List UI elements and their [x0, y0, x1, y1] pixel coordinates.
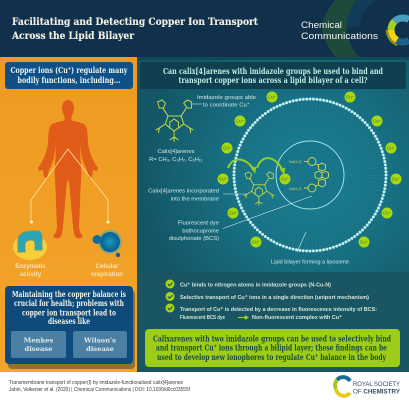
box: Menkes disease: disease	[24, 345, 53, 353]
copper ions: Cu⁺	[360, 240, 369, 244]
RSC wordmark	[353, 382, 400, 396]
label: cellular respiration: Cellular	[96, 263, 119, 270]
findings text: Non-fluorescent complex with Cu⁺	[252, 314, 342, 321]
calix[4]arene molecule	[156, 100, 193, 142]
label: imidazole groups: Imidazole groups able	[197, 95, 256, 101]
findings text: Selective transport of Cu⁺ ions in a single direction (uniport mechanism)	[180, 294, 369, 301]
icon: check 1	[166, 280, 174, 288]
text: balance message: copper ion transport lead to	[22, 308, 116, 318]
label: cellular respiration: respiration	[91, 271, 123, 278]
liposome close-up circle	[276, 141, 344, 209]
icon: enzyme	[13, 231, 47, 260]
label: enzymatic activity	[15, 263, 46, 278]
panel: copper functions	[0, 57, 137, 372]
title: Facilitating and Detecting Copper Ion Transport	[12, 16, 258, 28]
copper ions: Cu⁺	[346, 94, 355, 100]
text: balance message: diseases like	[48, 316, 90, 326]
liposome bilayer ring	[234, 99, 386, 251]
label: fluorescent dye	[169, 196, 312, 242]
label: fluorescent dye: bathocuproine	[182, 228, 219, 234]
text: balance message: crucial for health; problems with	[14, 298, 124, 308]
liposome spokes	[255, 120, 365, 230]
label: calixarenes in membrane: Calix[4]arenes incorporated	[148, 188, 219, 194]
label: calixarenes	[149, 149, 203, 163]
box: Wilson's disease	[73, 331, 127, 358]
journal name: Communications	[301, 31, 378, 42]
text: balance message	[12, 289, 126, 326]
heading: copper ions: Copper ions (Cu⁺) regulate many	[10, 65, 128, 75]
BCS dye molecule: NaO₃S	[289, 186, 302, 191]
label: calixarenes in membrane: into the membrane	[171, 196, 219, 202]
label: imidazole groups: to coordinate Cu⁺	[203, 102, 250, 108]
label: lipid bilayer	[271, 232, 349, 266]
box: Wilson's disease: disease	[86, 345, 115, 353]
box: Wilson's disease: Wilson's	[83, 336, 116, 344]
journal name: Chemical	[301, 20, 342, 31]
text: balance message: Maintaining the copper balance is	[12, 289, 126, 299]
panel: research question	[137, 57, 409, 372]
heading: question	[140, 62, 406, 89]
header band	[0, 0, 409, 57]
title	[11, 16, 258, 42]
copper ions: Cu⁺	[392, 176, 401, 182]
heading: copper ions: bodily functions, including...	[18, 75, 121, 86]
copper ions: Cu⁺	[223, 146, 232, 150]
citation footer: Jabin, Valkenier et al. (2020) | Chemical Communications | DOI: 10.1039/d0cc03555f	[9, 387, 191, 393]
membrane calix[4]arene molecule	[244, 172, 275, 206]
copper ions: Cu⁺	[281, 176, 290, 182]
RSC wordmark: OF CHEMISTRY	[353, 390, 400, 396]
label: enzymatic activity: activity	[20, 271, 42, 278]
panel: copper balance	[5, 286, 135, 369]
box: Menkes disease: Menkes	[24, 336, 53, 344]
title: Across the Lipid Bilayer	[11, 30, 134, 42]
citation footer: Transmembrane transport of copper(I) by imidazole-functionalised calix[4]arenes	[9, 380, 183, 386]
icon: journal ring logo	[387, 18, 409, 45]
label: calixarenes in membrane	[148, 188, 247, 202]
BCS dye molecule: NaO₃S	[289, 159, 302, 164]
copper ions: Cu⁺	[373, 118, 382, 124]
copper ions: Cu⁺	[252, 240, 261, 244]
findings text: Fluorescent BCS dye	[180, 315, 226, 321]
green transport arrows	[228, 158, 285, 174]
icon: RSC logo	[335, 377, 350, 396]
journal name	[301, 20, 378, 42]
label: lipid bilayer: Lipid bilayer forming a liposome	[271, 260, 349, 266]
copper ions	[218, 92, 402, 248]
RSC wordmark: ROYAL SOCIETY	[353, 382, 400, 388]
BCS dye molecule	[289, 158, 328, 192]
human silhouette	[38, 100, 98, 238]
label: fluorescent dye: disulphonate (BCS)	[169, 236, 219, 242]
copper ions: Cu⁺	[387, 146, 396, 150]
conclusion box	[145, 329, 400, 367]
label: calixarenes: Calix[4]arenes	[157, 149, 195, 155]
label: calixarenes: R= CH₃, C₃H₇, C₆H₁₁	[149, 157, 203, 163]
findings text: Cu⁺ binds to nitrogen atoms in imidazole groups (N-Cu-N)	[180, 282, 331, 288]
arrow: fluorescence change	[238, 316, 248, 320]
icon: check 2	[166, 292, 174, 301]
label: cellular respiration	[91, 263, 123, 278]
copper ions: Cu⁺	[236, 118, 245, 124]
label: enzymatic activity: Enzymatic	[15, 263, 46, 270]
heading: copper ions	[5, 62, 133, 89]
icon: cell respiration	[92, 230, 122, 257]
copper ions: Cu⁺	[383, 210, 392, 216]
findings text: Transport of Cu⁺ is detected by a decrease in fluorescence intensity of BCS:	[180, 306, 377, 313]
copper ions: Cu⁺	[229, 210, 238, 216]
copper ions: Cu⁺	[268, 94, 277, 100]
copper ions: Cu⁺	[219, 176, 228, 182]
icon: check 3	[166, 304, 174, 312]
label: imidazole groups	[192, 95, 256, 108]
key findings list	[166, 280, 377, 321]
findings text	[180, 282, 377, 321]
connector lines from body	[30, 149, 110, 224]
citation footer	[9, 380, 191, 393]
box: Menkes disease	[11, 331, 66, 358]
label: fluorescent dye: Fluorescent dye	[178, 220, 219, 226]
